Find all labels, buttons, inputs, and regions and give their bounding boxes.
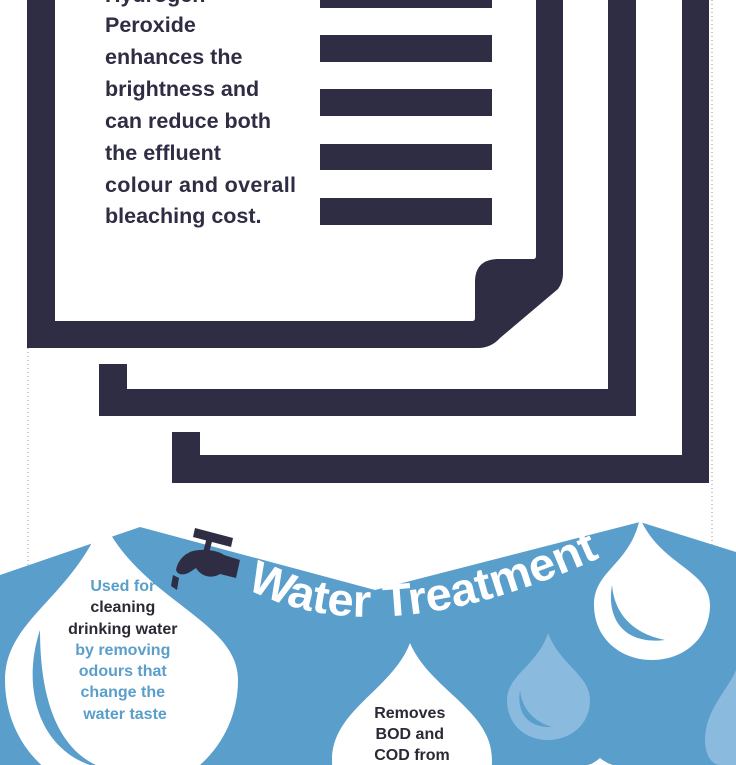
icon: left water drop [5, 520, 238, 765]
text: drinking water: Used for [90, 578, 155, 595]
text: peroxide bleaching: the effluent [105, 141, 221, 165]
text: peroxide bleaching: bleaching cost. [105, 204, 262, 228]
text: peroxide bleaching: brightness and [105, 77, 259, 101]
text: drinking water: drinking water [68, 621, 177, 638]
icon: right water drop [594, 518, 710, 660]
icon: edge light drop [705, 670, 736, 765]
text: BOD COD: BOD and [376, 726, 444, 743]
text: BOD COD: COD from [374, 747, 450, 764]
text: peroxide bleaching: can reduce both [105, 109, 271, 133]
text: BOD COD: Removes [374, 705, 445, 722]
text: drinking water: change the [81, 684, 165, 701]
text: drinking water: water taste [82, 706, 167, 723]
text: drinking water: by removing [75, 642, 170, 659]
title: Water Treatment: Water Treatment [253, 536, 600, 617]
icon: small white drop [586, 758, 614, 765]
second page [99, 0, 636, 416]
panel: water treatment blue background [0, 522, 736, 765]
text: drinking water: odours that [79, 663, 167, 680]
text: drinking water: cleaning [90, 599, 155, 616]
text: peroxide bleaching: Peroxide [105, 13, 196, 37]
document stack icon [27, 0, 709, 483]
icon: middle water drop [332, 643, 492, 765]
text lines bars [320, 0, 492, 225]
third page [172, 0, 709, 483]
icon: light water drop [507, 633, 590, 740]
text: peroxide bleaching: colour and overall [105, 173, 296, 197]
icon: faucet [171, 528, 240, 590]
text: peroxide bleaching: enhances the [105, 45, 242, 69]
front page with folded corner [27, 0, 563, 348]
